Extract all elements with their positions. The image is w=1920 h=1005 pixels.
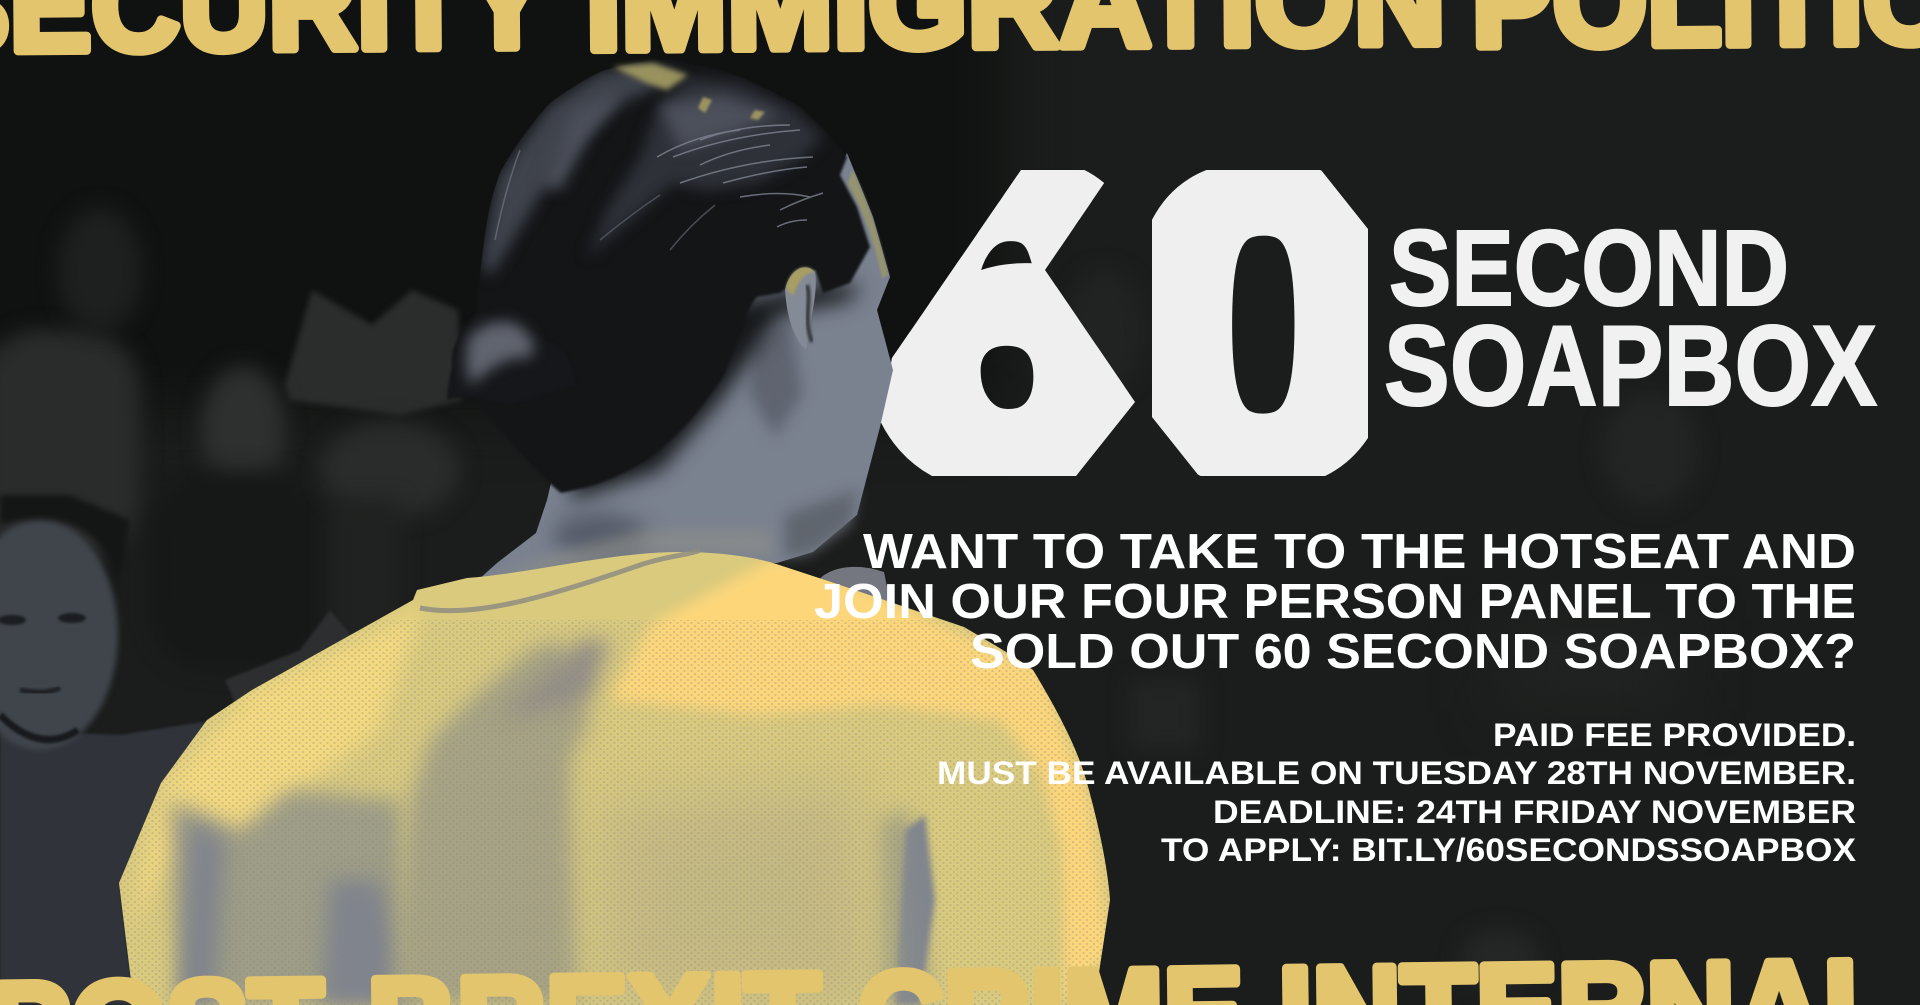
numeral 6: 6 [868, 89, 1143, 560]
speaker: shadow left of ear [750, 320, 802, 437]
shirt bright left shoulder [135, 614, 420, 906]
shirt right fold [880, 810, 930, 1005]
speaker: jaw shade [785, 490, 857, 558]
logo word: SECOND: SECOND [1389, 207, 1789, 328]
availability line: MUST BE AVAILABLE ON TUESDAY 28TH NOVEMBER. [937, 755, 1856, 791]
top band of words [0, 0, 1920, 86]
dark top-left shade [0, 0, 1000, 410]
shirt collar line [420, 550, 700, 611]
bottom band of words [0, 934, 1899, 1005]
shirt lower middle tone [600, 780, 880, 1005]
shirt lower grey left [170, 790, 410, 1005]
headline line 3: SOLD OUT 60 SECOND SOAPBOX? [970, 625, 1856, 679]
apply line: TO APPLY: BIT.LY/60SECONDSSOAPBOX [1161, 832, 1857, 868]
speaker: hair bun [447, 313, 575, 405]
speaker: neck low shadow [552, 513, 648, 557]
headline line 2: JOIN OUR FOUR PERSON PANEL TO THE [814, 575, 1856, 629]
speaker: lower neck olive tint [480, 530, 775, 585]
speaker: hair gold sheen [613, 63, 765, 120]
speaker: shirt [119, 550, 1120, 1005]
microphone [813, 567, 892, 612]
audience at right [1065, 270, 1698, 990]
speaker: hair [452, 60, 870, 493]
details text [937, 717, 1857, 868]
paid fee line: PAID FEE PROVIDED. [1493, 717, 1856, 753]
shirt centre tone [500, 640, 610, 720]
headline line 1: WANT TO TAKE TO THE HOTSEAT AND [863, 525, 1856, 579]
shirt centre grey column [390, 640, 590, 1005]
shirt bright shoulder [610, 560, 1110, 1005]
numeral 0: 0 [1130, 88, 1398, 560]
speaker: hair highlights [482, 65, 823, 277]
shirt knit texture [120, 620, 1120, 1005]
headline text [814, 525, 1856, 679]
big numeral 60 [881, 170, 1368, 476]
speaker: neck and face skin [467, 153, 893, 590]
speaker: skin edge rim [848, 170, 888, 278]
speaker: ear [785, 267, 816, 350]
audience at left [0, 208, 462, 1005]
speaker: soft hair shadow [570, 285, 860, 500]
deadline line: DEADLINE: 24TH FRIDAY NOVEMBER [1213, 794, 1856, 830]
